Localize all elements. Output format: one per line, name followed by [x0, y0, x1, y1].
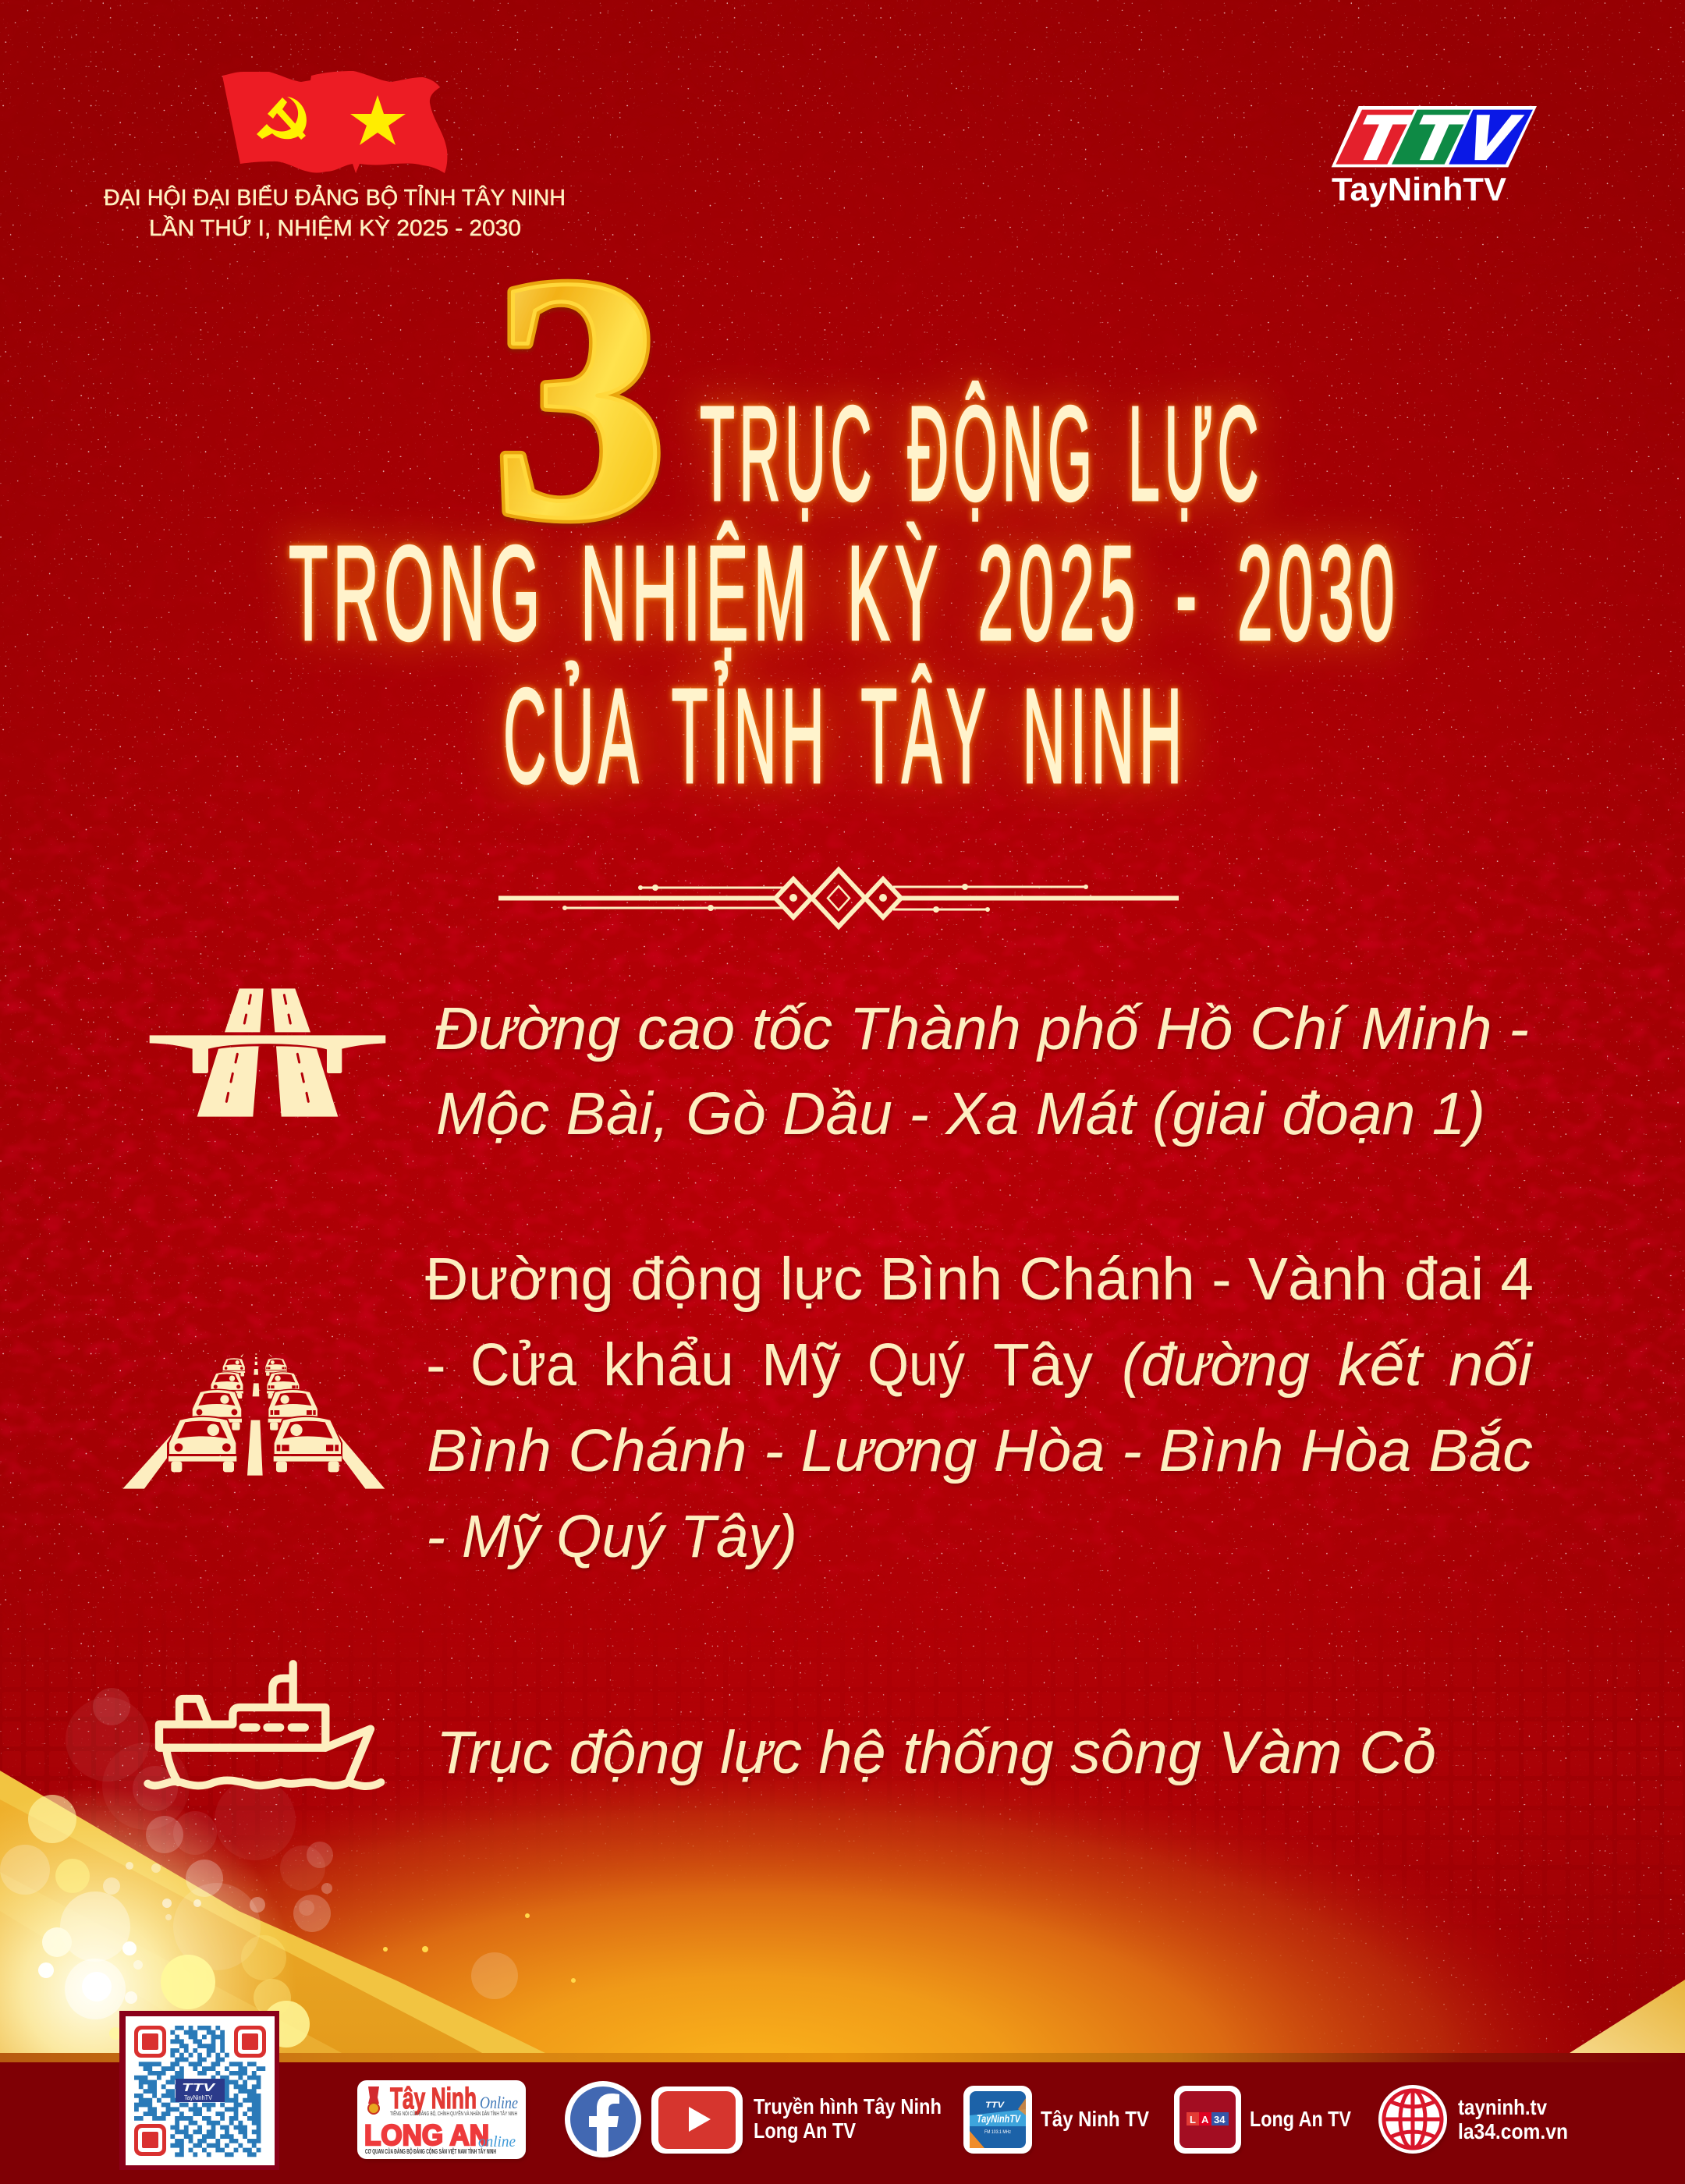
text: social channel: Long An TV: [754, 2118, 856, 2143]
gold number 3: 3: [492, 206, 667, 590]
text: social channel: [754, 2094, 942, 2143]
party flag logo: [222, 71, 447, 173]
text: Tay Ninh TV: Tây Ninh TV: [1041, 2107, 1149, 2131]
text: dynamic road: kết: [1338, 1331, 1425, 1399]
text: dynamic road: (đường: [1122, 1331, 1310, 1399]
icon: hammer and sickle: [257, 97, 307, 140]
text: dynamic road: Đường động lực Bình Chánh - Vành đai 4: [425, 1246, 1534, 1313]
text: websites: [1458, 2095, 1568, 2143]
icon: Tay Ninh TV app: TTV: [985, 2101, 1006, 2110]
divider ornament: [498, 870, 1179, 927]
QR finder marks: [134, 2026, 266, 2156]
icon: facebook: [565, 2081, 641, 2157]
QR center TTV badge: [176, 2079, 225, 2102]
congress caption: ĐẠI HỘI ĐẠI BIỂU ĐẢNG BỘ TỈNH TÂY NINH: [104, 184, 566, 211]
text: dynamic road: [425, 1246, 1534, 1570]
icon: Tay Ninh TV app: [963, 2086, 1032, 2154]
icon: medal: [368, 2086, 379, 2114]
icon: ship: [147, 1664, 381, 1786]
text: Long An TV: Long An TV: [1250, 2107, 1351, 2131]
TayNinhTV wordmark: TayNinhTV: [1332, 171, 1506, 207]
text: expressway: Đường cao tốc Thành phố Hồ Chí Minh -: [435, 995, 1529, 1062]
TTV logo: [1332, 103, 1537, 172]
icon: globe: [1378, 2085, 1447, 2154]
congress caption: [104, 184, 566, 241]
newspaper logos card: Tây Ninh: [390, 2083, 477, 2115]
text: social channel: Truyền hình Tây Ninh: [754, 2094, 942, 2118]
text: dynamic road: - Mỹ Quý Tây): [426, 1503, 797, 1570]
text: dynamic road: Cửa: [470, 1331, 576, 1399]
icon: Long An TV app: 34: [1214, 2114, 1226, 2126]
icon: Long An TV app: [1174, 2086, 1241, 2154]
text: expressway: [435, 995, 1529, 1147]
newspaper logos card: online: [478, 2133, 516, 2150]
text: dynamic road: Quý: [867, 1331, 965, 1399]
text: websites: tayninh.tv: [1458, 2095, 1547, 2119]
icon: Tay Ninh TV app: FM 103.1 MHz: [984, 2130, 1011, 2135]
TTV logo: T: [1343, 103, 1418, 172]
text: dynamic road: Mỹ: [761, 1331, 841, 1399]
icon: star: [350, 95, 406, 145]
text: river axis: Trục động lực hệ thống sông Vàm Cỏ: [436, 1719, 1436, 1786]
icon: Long An TV app: A: [1201, 2114, 1209, 2126]
newspaper logos card: CƠ QUAN CỦA ĐẢNG BỘ ĐẢNG CỘNG SẢN VIỆT NAM TỈNH TÂY NINH: [365, 2148, 496, 2155]
newspaper logos card: TIẾNG NÓI CỦA ĐẢNG BỘ, CHÍNH QUYỀN VÀ NHÂN DÂN TỈNH TÂY NINH: [390, 2109, 517, 2117]
title: [289, 378, 1399, 811]
icon: highway: [150, 988, 385, 1117]
congress caption: LẦN THỨ I, NHIỆM KỲ 2025 - 2030: [149, 214, 521, 241]
QR center TTV badge: TayNinhTV: [184, 2094, 213, 2101]
icon: Tay Ninh TV app: TayNinhTV: [977, 2112, 1021, 2125]
text: dynamic road: -: [426, 1331, 446, 1399]
gold triangle bottom right: [1570, 1980, 1685, 2053]
QR code: [119, 2011, 279, 2170]
TTV logo: V: [1453, 103, 1528, 172]
icon: Long An TV app: L: [1190, 2114, 1196, 2126]
text: dynamic road: khẩu: [603, 1331, 734, 1399]
icon: youtube: [651, 2086, 743, 2154]
newspaper logos card: [357, 2080, 526, 2159]
text: websites: la34.com.vn: [1458, 2119, 1568, 2143]
gold number 3: 3: [492, 206, 667, 590]
newspaper logos card: LONG AN: [364, 2119, 489, 2151]
footer bar: [0, 2053, 1685, 2184]
text: dynamic road: Bình Chánh - Lương Hòa - Bình Hòa Bắc: [427, 1417, 1533, 1484]
QR center TTV badge: TTV: [182, 2081, 217, 2094]
TTV logo: T: [1399, 103, 1474, 172]
icon: traffic road: [122, 1353, 385, 1489]
text: expressway: Mộc Bài, Gò Dầu - Xa Mát (giai đoạn 1): [436, 1080, 1485, 1147]
newspaper logos card: Online: [480, 2093, 518, 2112]
text: dynamic road: nối: [1449, 1331, 1534, 1399]
text: dynamic road: Tây: [993, 1331, 1093, 1399]
golden corner with bokeh: [0, 1688, 576, 2054]
